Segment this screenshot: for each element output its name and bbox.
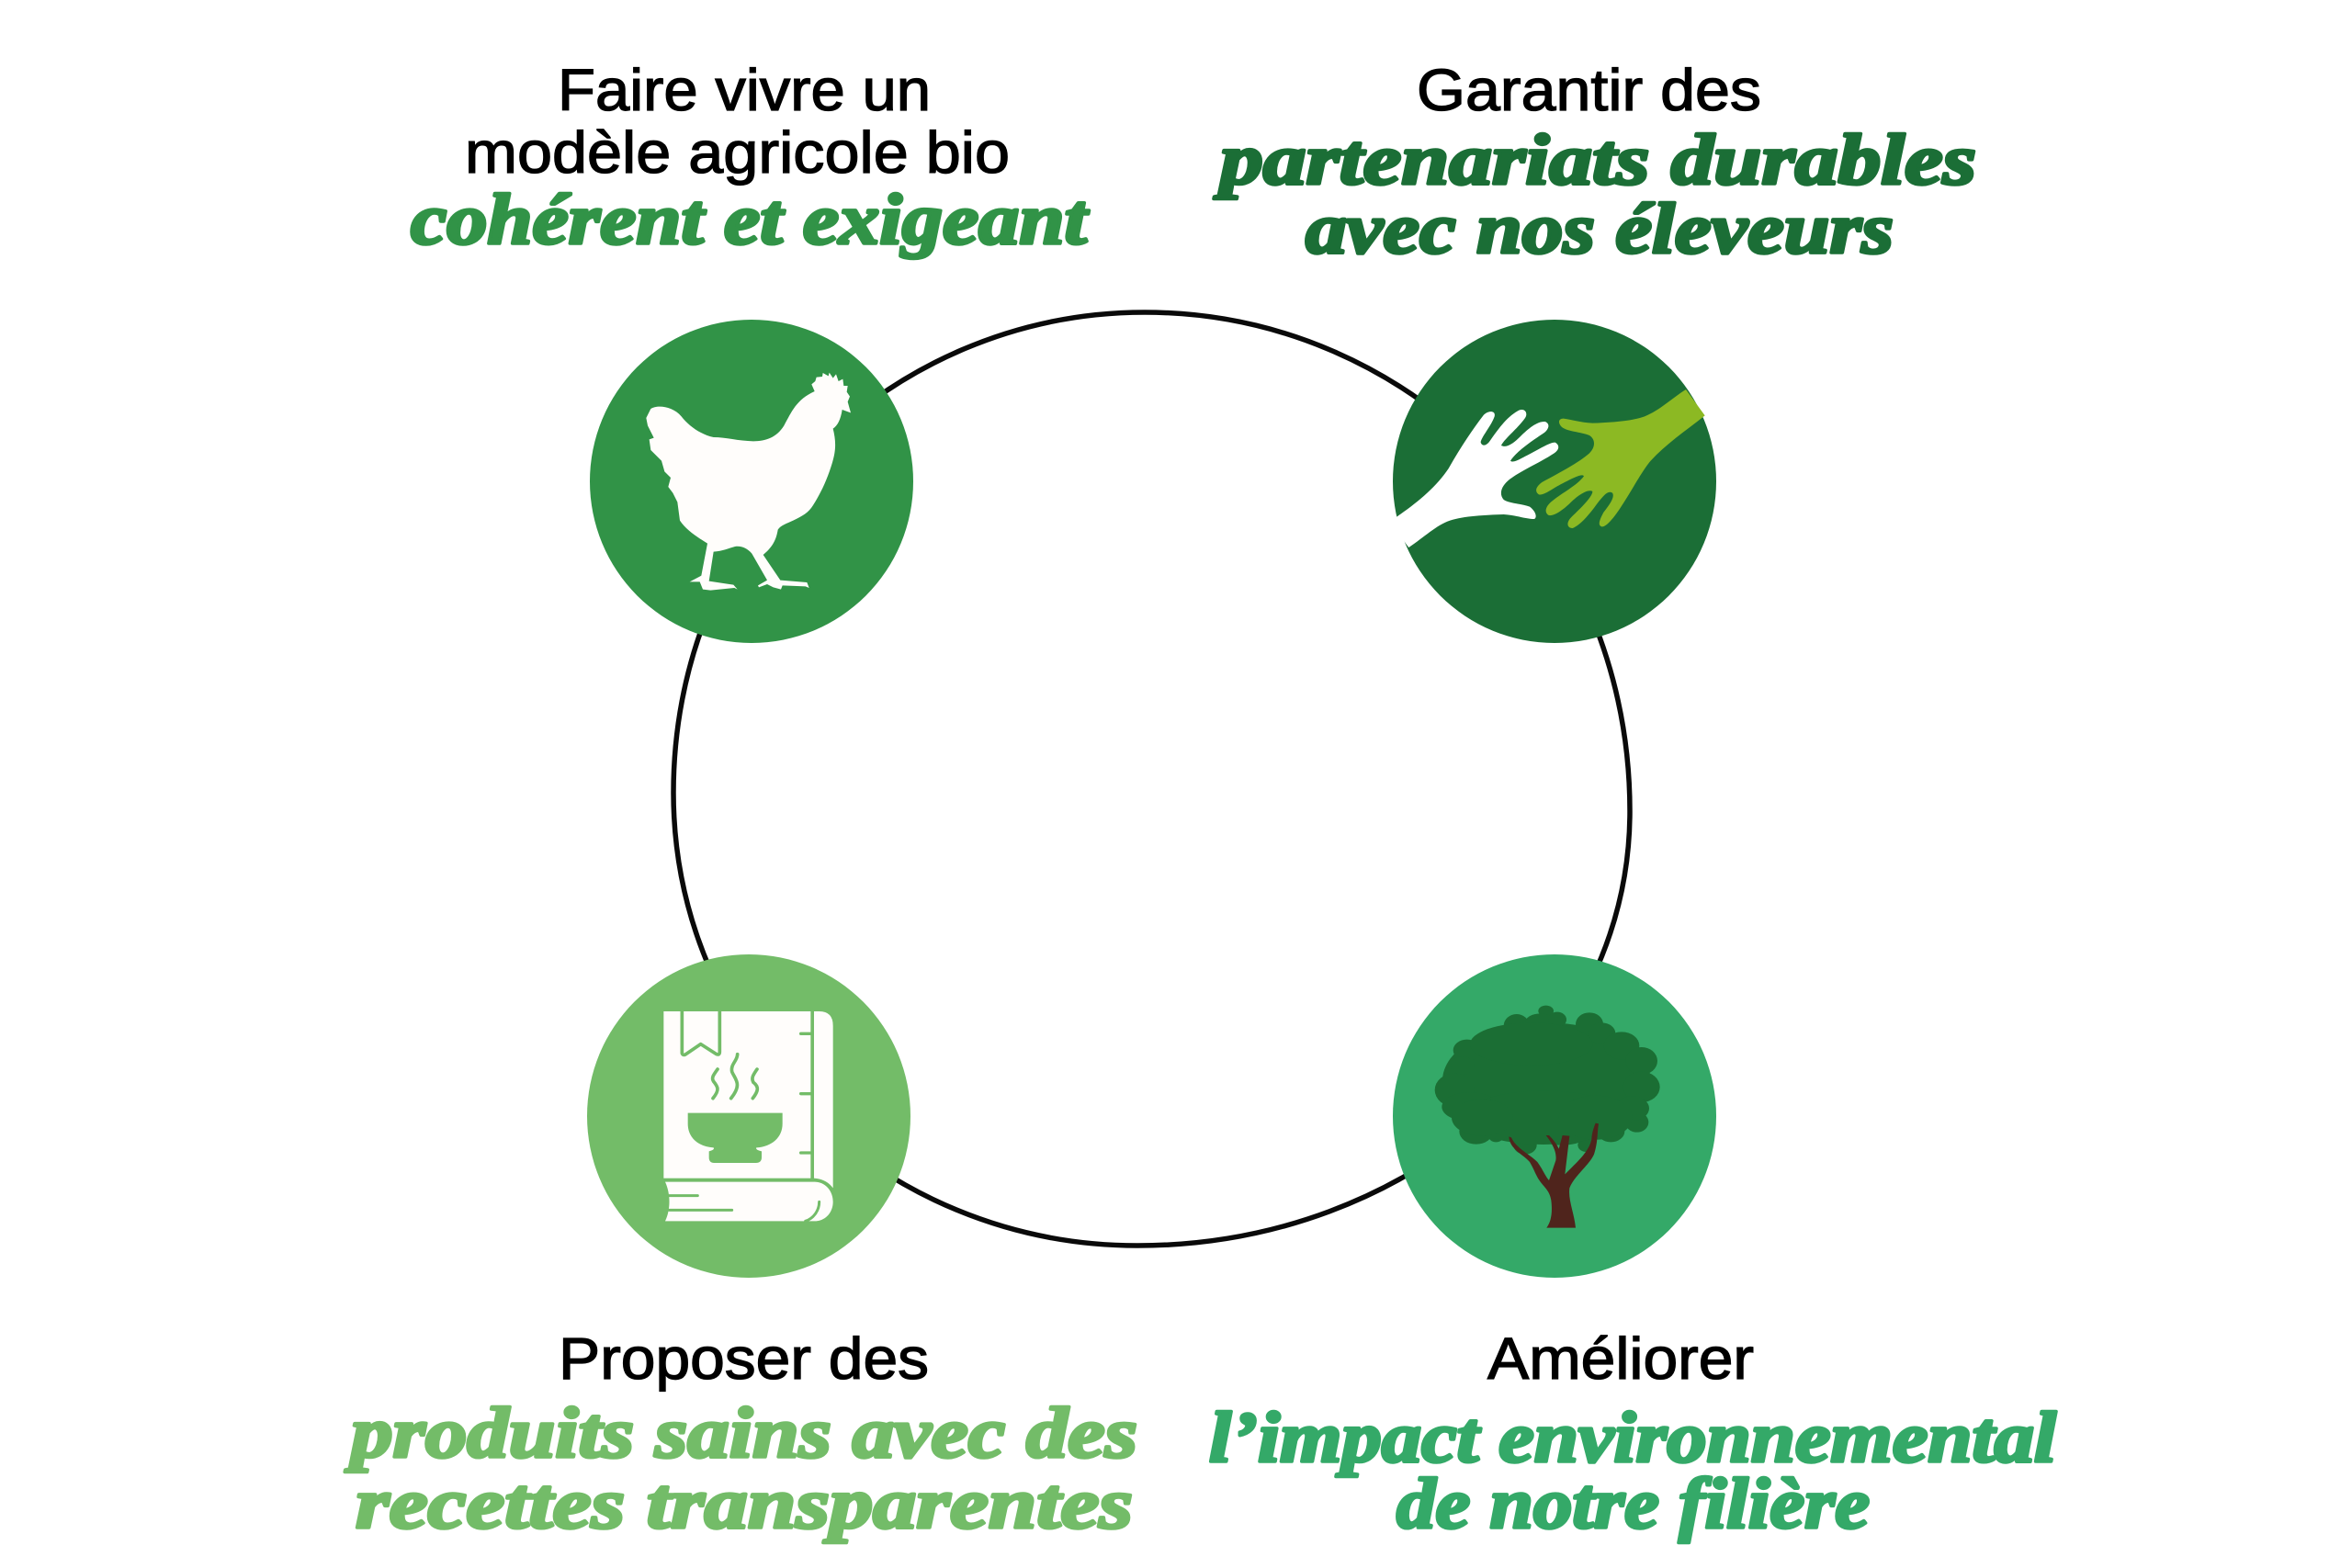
- heading: top right: Garantir des: [1417, 57, 1761, 123]
- heading: bottom right: Améliorer: [1487, 1325, 1754, 1392]
- heading: bottom left: produits sains avec des: [345, 1393, 1137, 1472]
- panel: tree circle: [1393, 954, 1716, 1278]
- heading: top left: modèle agricole bio: [465, 119, 1010, 186]
- icon: chicken: [646, 373, 851, 591]
- heading: top left: Faire vivre un: [558, 57, 931, 123]
- heading: bottom left: [345, 1325, 1137, 1543]
- heading: top left: [411, 57, 1090, 259]
- connecting ring: [673, 312, 1630, 1246]
- heading: bottom left: Proposer des: [559, 1325, 929, 1392]
- heading: bottom left: recettes transparentes: [356, 1463, 1133, 1543]
- icon: green hand: [1536, 389, 1705, 528]
- heading: bottom right: l’impact environnemental: [1209, 1397, 2056, 1477]
- heading: top right: avec nos éleveurs: [1306, 188, 1894, 268]
- heading: top right: partenariats durables: [1214, 119, 1976, 199]
- panel: book circle: [587, 954, 910, 1278]
- heading: top left: cohérent et exigeant: [411, 179, 1090, 259]
- icon: white hand: [1390, 410, 1558, 547]
- heading: bottom right: de notre filière: [1396, 1463, 1870, 1543]
- heading: bottom right: [1209, 1325, 2056, 1543]
- heading: top right: [1214, 57, 1976, 268]
- panel: chicken circle: [590, 320, 913, 643]
- icon: recipe book: [663, 1011, 833, 1221]
- panel: hands circle: [1390, 320, 1716, 643]
- icon: tree: [1435, 1006, 1660, 1228]
